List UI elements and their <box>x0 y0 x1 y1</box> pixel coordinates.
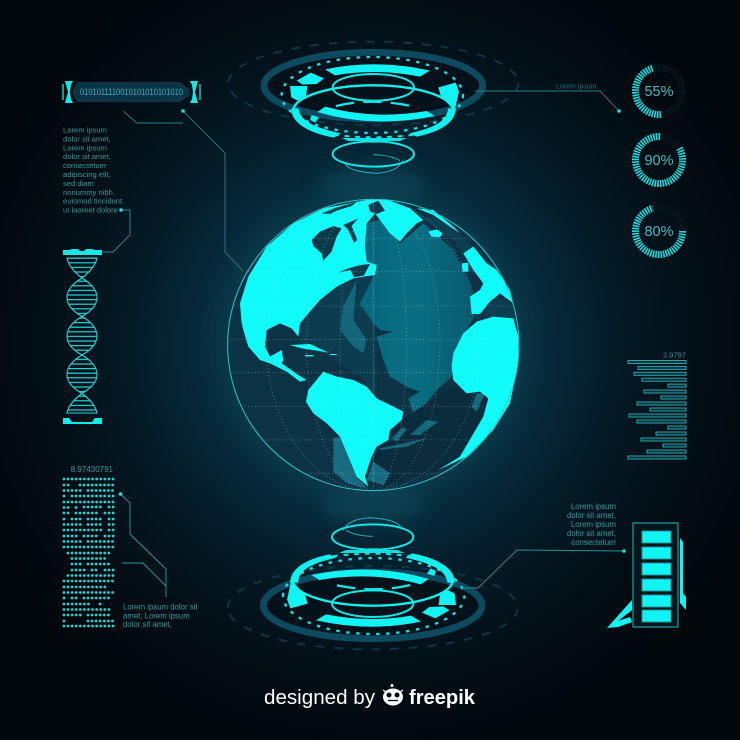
footer: designed by freepik <box>264 684 476 709</box>
gauge 80% <box>636 208 682 254</box>
top right north Atlantic dark <box>423 217 497 270</box>
bottom hologram hoop <box>228 518 518 649</box>
caribbean islands <box>290 344 337 356</box>
outer dim dashes <box>228 42 518 125</box>
connector: hoop to battery text <box>460 549 626 588</box>
dot matrix <box>64 465 114 626</box>
DNA caps <box>63 249 102 255</box>
continent: europe <box>463 247 513 314</box>
text block: upper left: Lorem ipsum <box>63 143 107 152</box>
gauge 55%: 55% <box>644 84 674 100</box>
globe outline <box>228 199 519 491</box>
footer: designed by freepik: designed by <box>264 687 375 709</box>
callout label top right: Lorem ipsum <box>556 84 597 90</box>
text block: upper left: sed diam <box>63 179 94 188</box>
mid Atlantic sea <box>360 220 477 413</box>
binary code box: 0101011110010101010101010 <box>80 87 183 97</box>
text block: upper left: Lorem ipsum <box>63 126 107 134</box>
gauge 90% <box>636 136 683 184</box>
dot matrix: 8.97430791 <box>71 465 114 474</box>
continent: north america and greenland <box>240 199 423 382</box>
ring <box>293 85 453 111</box>
connector: binary to globe <box>123 109 243 271</box>
center dashes <box>336 102 418 108</box>
text block: upper left <box>63 126 123 215</box>
hudson bay and arctic <box>312 201 385 277</box>
text block: lower left: dolor sit amet, <box>123 620 172 629</box>
text block: lower left <box>123 602 198 629</box>
battery panel <box>607 523 686 628</box>
bar chart: 2.9797 <box>663 350 686 360</box>
connector: dot matrix lines <box>119 492 166 597</box>
text block: lower right: dolor sit amet, <box>567 529 616 538</box>
text block: upper left: ut laoreet dolore <box>63 206 118 215</box>
bar chart <box>628 350 686 459</box>
text block: lower right: Lorem ipsum <box>571 502 616 511</box>
footer: designed by freepik: freepik <box>409 686 476 709</box>
graticule <box>220 199 527 491</box>
lower ring <box>291 108 456 138</box>
DNA helix <box>63 249 102 424</box>
callout label top right <box>475 84 621 113</box>
text block: upper left: dolor sit amet, <box>63 134 111 143</box>
continent: south america <box>306 372 403 487</box>
lower ellipse <box>333 141 414 167</box>
thin arcs <box>345 155 403 173</box>
plate <box>264 52 483 119</box>
text block: upper left: adipiscing elit, <box>63 170 111 179</box>
ocean base <box>228 199 519 491</box>
upper ellipse <box>333 74 414 101</box>
shallow sea: left shelf <box>300 270 377 397</box>
binary code box <box>63 81 200 103</box>
text block: upper left: nonummy nibh <box>63 188 113 197</box>
south Atlantic dark with patches <box>368 387 487 487</box>
text block: lower left: Lorem ipsum dolor sit <box>123 602 198 612</box>
text block: upper left: consectetuer <box>63 161 107 170</box>
DNA rungs <box>67 258 97 413</box>
top hologram hoop <box>228 42 518 173</box>
connector: text to DNA <box>103 208 130 252</box>
text block: lower right: Lorem ipsum <box>571 520 616 529</box>
text block: lower right <box>567 502 616 547</box>
text block: lower right: dolor sit amet, <box>567 511 616 520</box>
thick crescent <box>317 107 435 121</box>
text block: lower right: consectetuer <box>571 538 616 547</box>
globe <box>220 199 527 491</box>
text block: upper left: euismod tincidunt <box>63 197 123 206</box>
gauge 80%: 80% <box>644 224 674 240</box>
gauge 90%: 90% <box>644 153 674 169</box>
dotted ring <box>282 57 463 133</box>
text block: upper left: dolor sit amet, <box>63 152 111 161</box>
freepik icon <box>383 684 403 706</box>
gauge 55% <box>636 68 682 114</box>
continent: africa <box>438 317 518 470</box>
text block: lower left: amet, Lorem ipsum <box>123 611 190 620</box>
chunks <box>297 73 324 85</box>
top arc <box>325 64 430 77</box>
